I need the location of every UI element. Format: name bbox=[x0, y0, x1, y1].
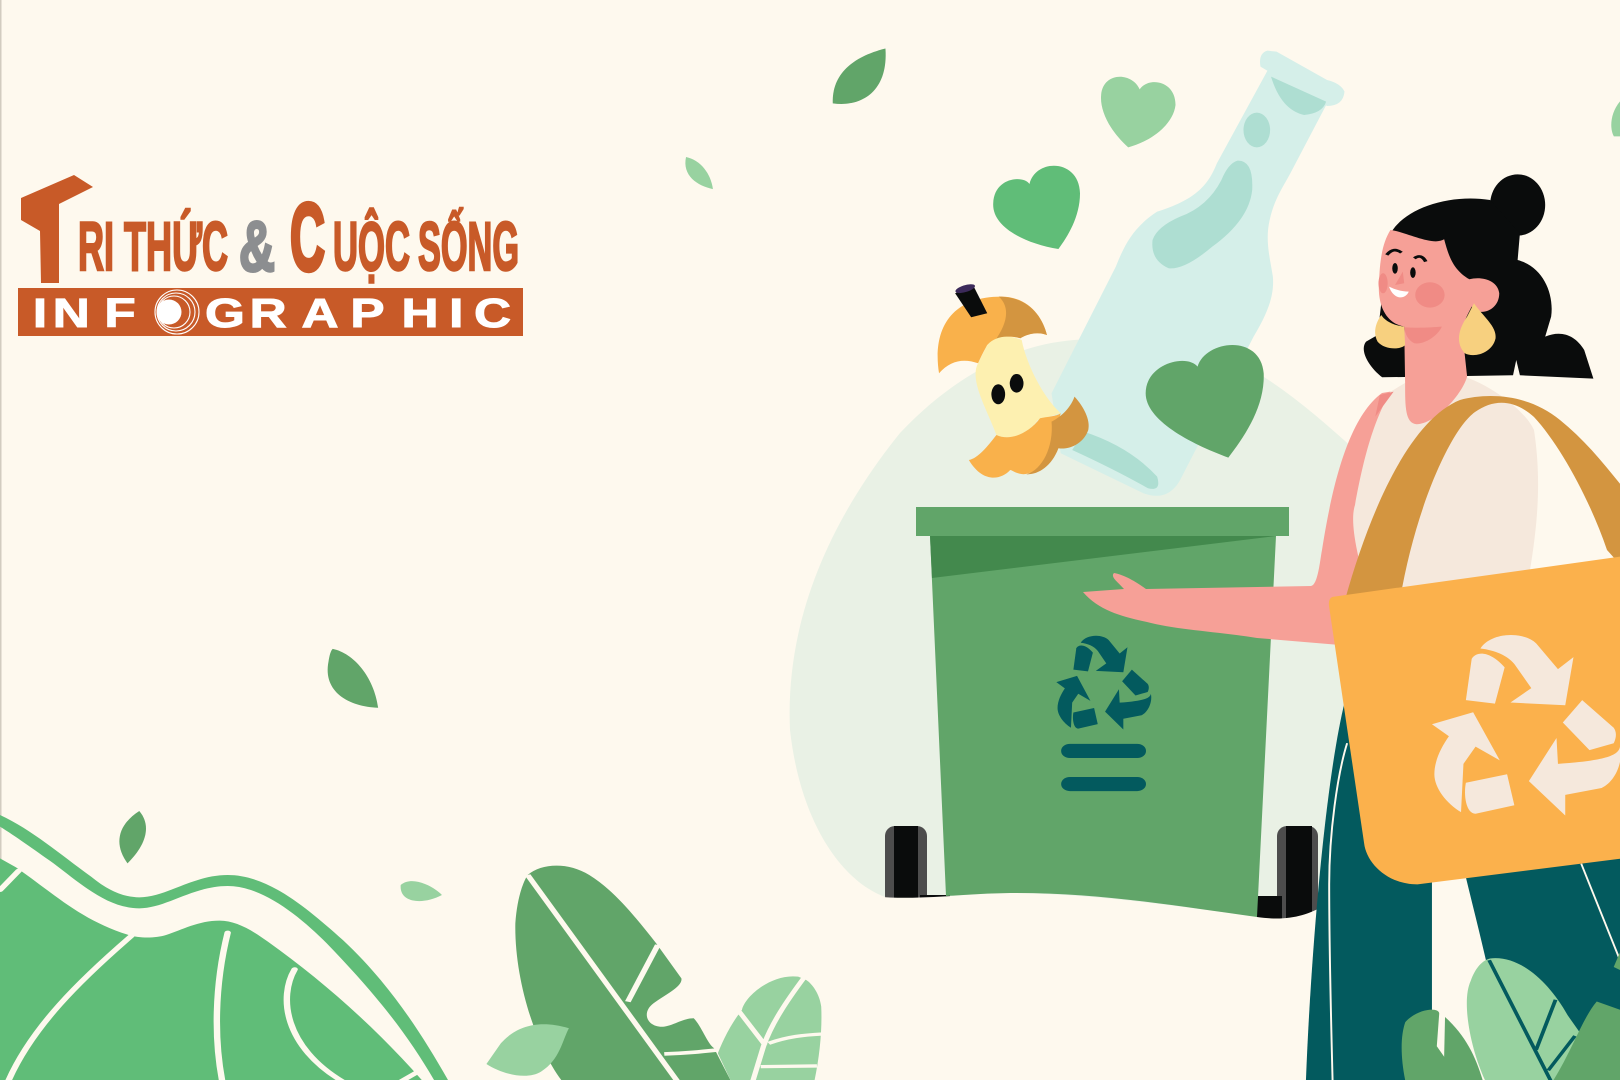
woman carrying tote bag bbox=[1083, 174, 1620, 1080]
floating leaves bbox=[328, 49, 1620, 708]
logo wordmark: UỘC bbox=[333, 208, 410, 285]
big leaf bbox=[515, 866, 731, 1080]
wheel: right bbox=[920, 826, 1318, 926]
bottom-right plants bbox=[1402, 950, 1620, 1080]
nose bbox=[1395, 272, 1404, 285]
recycling bin bbox=[880, 507, 1325, 960]
trousers bbox=[1306, 702, 1620, 1080]
logo: Tri Thức & Cuộc Sống Infographic: SỐNG bbox=[418, 208, 519, 285]
bin body bbox=[930, 536, 1276, 917]
bin bars bbox=[1061, 744, 1146, 791]
heart: large bbox=[1146, 345, 1264, 458]
smile bbox=[1389, 287, 1409, 297]
apple core bbox=[938, 282, 1089, 478]
leaf: right edge bbox=[1611, 101, 1620, 136]
logo wordmark: & bbox=[239, 208, 275, 287]
wheel: left bbox=[885, 826, 927, 906]
hair bbox=[1364, 174, 1593, 379]
bag strap bbox=[1345, 396, 1620, 600]
shoulder shade bbox=[1375, 392, 1394, 417]
leaf: small dark bbox=[119, 811, 146, 863]
earrings bbox=[1375, 303, 1496, 355]
ground wave bbox=[880, 893, 1325, 960]
eyes and brows bbox=[1387, 250, 1426, 278]
icon: recycle on bag bbox=[1432, 635, 1620, 816]
background blob behind bin bbox=[790, 335, 1355, 917]
arm bbox=[1083, 391, 1394, 645]
heart: medium bbox=[993, 166, 1080, 249]
tall light leaf bbox=[1467, 958, 1582, 1080]
heart: light bbox=[1101, 77, 1176, 147]
hill bbox=[0, 858, 423, 1080]
leaf: middle dark bbox=[328, 649, 378, 708]
tote bag bbox=[1329, 557, 1620, 884]
bottle, hearts and apple bbox=[938, 51, 1345, 496]
logo wordmark: C bbox=[290, 184, 325, 291]
bin lid bbox=[916, 507, 1289, 536]
logo icon: stylised T bbox=[21, 175, 93, 283]
bottom-left foliage bbox=[0, 811, 822, 1080]
cheeks bbox=[1378, 273, 1445, 308]
leaf: top light bbox=[685, 157, 713, 189]
top bbox=[1353, 377, 1538, 600]
head bbox=[1364, 174, 1593, 424]
face and neck bbox=[1379, 230, 1499, 424]
neck shadow bbox=[1404, 327, 1442, 344]
right dark leaf bbox=[1553, 1001, 1620, 1080]
logo wordmark bbox=[78, 184, 519, 291]
icon: recycle on bin bbox=[1056, 636, 1151, 729]
small dark leaf bbox=[1402, 1010, 1483, 1080]
hill band bbox=[0, 815, 449, 1080]
logo band: INFOGRAPHIC: INFGRAPHIC bbox=[33, 290, 511, 336]
bin symbol and bars bbox=[1056, 636, 1151, 791]
logo: Tri Thức & Cuộc Sống Infographic bbox=[18, 175, 523, 336]
right light leaf bbox=[718, 976, 822, 1080]
bin shadow bbox=[930, 536, 1276, 578]
leaf: top dark bbox=[833, 49, 886, 104]
front light leaf bbox=[486, 1024, 569, 1076]
leaf: small light bbox=[401, 881, 442, 901]
glass bottle bbox=[1052, 51, 1345, 496]
edge leaf tip bbox=[1614, 950, 1620, 970]
logo wordmark: RI THỨC bbox=[78, 208, 228, 285]
